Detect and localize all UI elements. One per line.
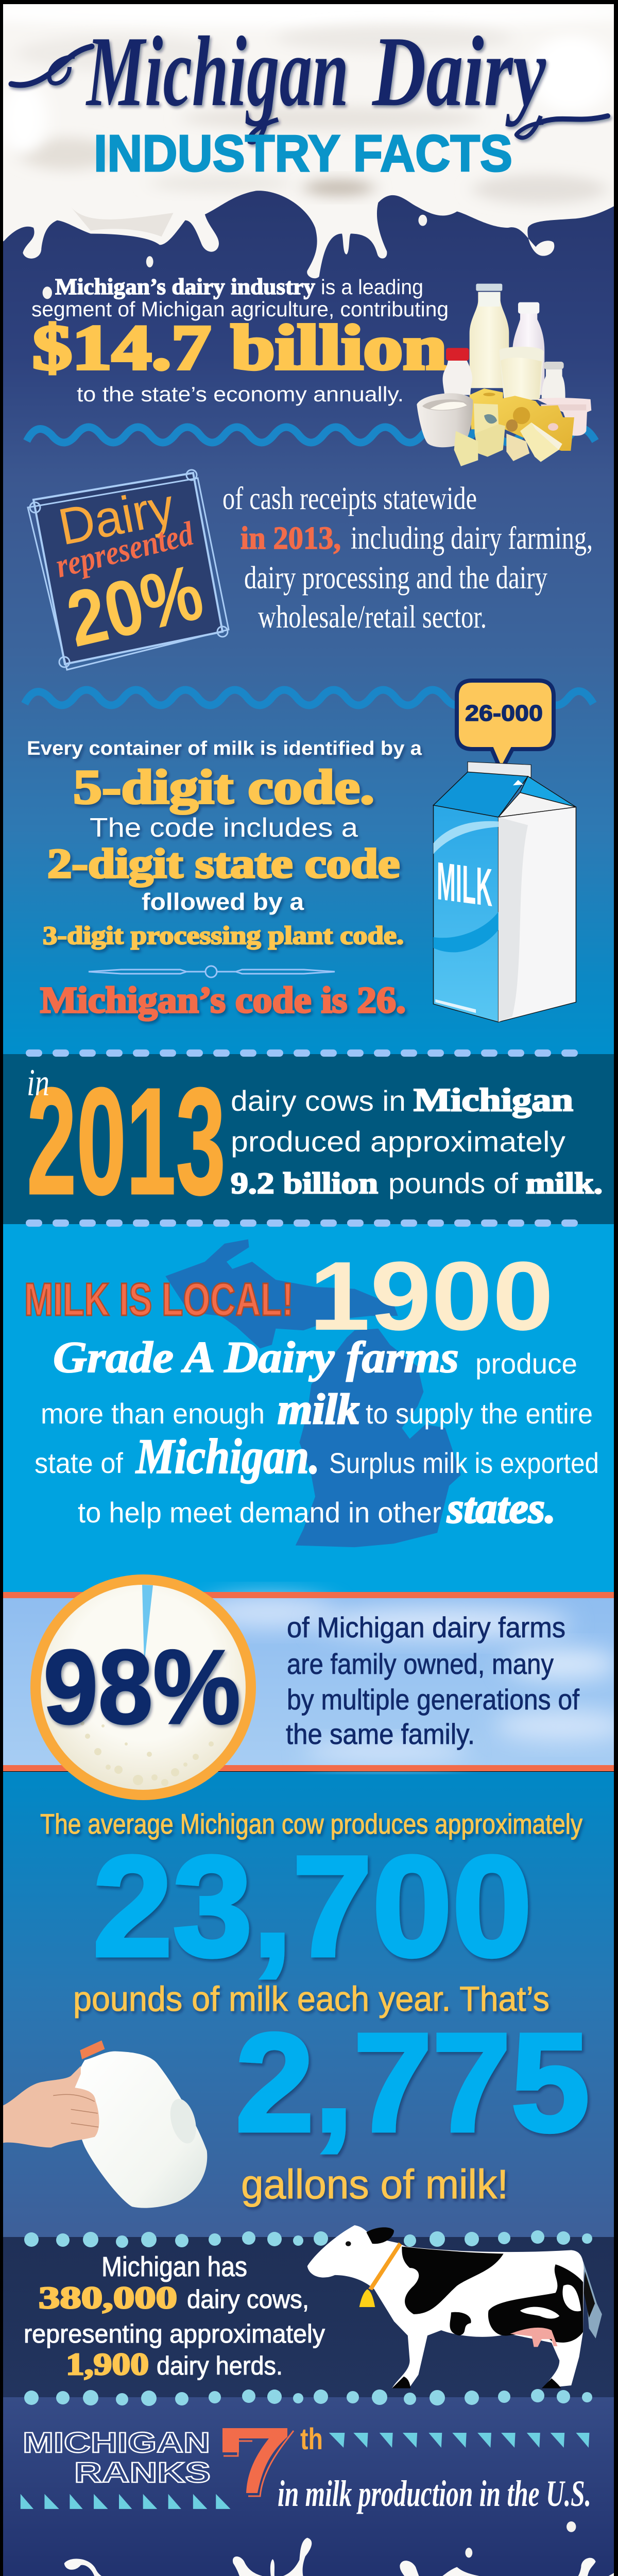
text: dairy industry intro (31, 274, 449, 321)
text: grade A farms: more than enough (41, 1397, 265, 1430)
band background (0, 2237, 618, 2397)
panel: milk code (27, 681, 576, 1022)
icon: cow (307, 2225, 602, 2388)
text: cow counts: 1,900 (66, 2347, 149, 2381)
pie chart: 98% (30, 1574, 256, 1800)
text: milk container code: 3-digit processing plant code. (43, 921, 404, 950)
text: dairy industry intro: Michigan’s dairy industry (55, 274, 315, 299)
text: pounds of milk: pounds of milk each year. That’s (73, 1979, 550, 2019)
text: production facts: produced approximately (231, 1125, 565, 1158)
text: grade A farms: produce (475, 1347, 577, 1380)
dots row (24, 2230, 592, 2406)
text: milk container code (27, 738, 422, 1021)
text: grade A farms: milk (278, 1385, 359, 1433)
lower gradient background (0, 2397, 618, 2576)
text: grade A farms: states. (447, 1484, 556, 1532)
text: production facts: milk. (526, 1166, 603, 1200)
speech bubble: 26-000: 26-000 (465, 701, 543, 726)
panel: 2013 production band (0, 1053, 618, 1226)
map: Michigan (165, 1239, 461, 1547)
text: cow counts: dairy herds. (157, 2351, 283, 2380)
panel: cow production background (0, 1772, 618, 2239)
text: family owned: by multiple generations of (287, 1683, 579, 1716)
text: gallons of milk: gallons of milk! (241, 2161, 508, 2207)
panel: 98 percent family owned (0, 1574, 618, 1800)
text: production facts: 9.2 billion (231, 1166, 378, 1200)
panel: header milk pour (0, 0, 618, 299)
panel: milk is local (0, 1223, 618, 1592)
text: cow counts: Michigan has (101, 2251, 247, 2282)
title: Michigan Dairy (11, 16, 608, 142)
text: production facts: dairy cows in (231, 1084, 406, 1117)
text: cow counts: representing approximately (24, 2319, 325, 2348)
panel: ranks 7th (21, 2422, 591, 2514)
triangle rows (21, 2433, 589, 2509)
text: in: in (27, 1062, 49, 1104)
text: th: th (300, 2422, 323, 2456)
text: milk container code: 2-digit state code (47, 841, 400, 887)
icon: dairy products (417, 284, 591, 466)
milk drip shape (0, 0, 618, 299)
text: grade A farms: state of (35, 1447, 123, 1479)
sky background (0, 1597, 618, 1767)
background gradient (0, 0, 618, 1054)
wave divider (25, 690, 593, 705)
text: production facts: Michigan (414, 1081, 573, 1118)
icon: milk carton: MILK (437, 851, 492, 918)
wave divider (27, 427, 595, 443)
icon: milk carton (434, 762, 576, 1022)
text: family owned: the same family. (286, 1718, 475, 1750)
stat: 7 (222, 2428, 294, 2496)
text: milk container code: The code includes a (90, 813, 358, 843)
badge: Dairy represented 20%: 20% (59, 548, 211, 664)
text: cow counts: dairy cows, (187, 2285, 309, 2314)
title: Michigan Dairy: Dairy (372, 16, 546, 127)
panel: 20 percent (25, 470, 593, 705)
stat: 23,700: 23,700 (93, 1826, 532, 1986)
panel: economy (27, 274, 595, 466)
text: family owned (286, 1611, 579, 1750)
dashes (29, 1049, 588, 1057)
text: grade A farms: to help meet demand in other (78, 1496, 441, 1529)
dashes (29, 1219, 588, 1227)
subtitle: Industry Facts: INDUSTRY FACTS (94, 125, 512, 182)
text: cow counts (24, 2251, 325, 2381)
milk splash shape (0, 2521, 618, 2576)
text: grade A farms: Michigan. (135, 1429, 320, 1484)
text: cash receipts: wholesale/retail sector. (258, 600, 487, 635)
text: grade A farms: to supply the entire (366, 1397, 593, 1430)
text: grade A farms: Grade A Dairy farms (53, 1332, 459, 1382)
text: production facts: pounds of (388, 1167, 518, 1199)
text: family owned: are family owned, many (287, 1648, 554, 1680)
stat: 2,775: 2,775 (235, 2004, 590, 2161)
stat: 1900: 1900 (309, 1242, 554, 1351)
text: milk container code: Every container of milk is identified by a (27, 738, 422, 759)
text: milk container code: followed by a (142, 888, 304, 915)
text: cash receipts: dairy processing and the dairy (244, 561, 547, 596)
text: dairy industry intro: segment of Michigan agriculture, contributing (31, 297, 449, 321)
heading: milk is local: MILK IS LOCAL! (24, 1274, 294, 1326)
text: production facts (231, 1081, 603, 1200)
panel: footer milk splash (0, 2521, 618, 2576)
text: cow counts: 380,000 (39, 2281, 177, 2315)
text: to the state's economy: to the state’s economy annually. (77, 382, 404, 406)
orange rules (0, 1595, 618, 1768)
badge: Dairy represented 20% (28, 470, 229, 670)
stat: $14.7 billion: $14.7 billion (32, 312, 447, 383)
text: Michigan ranks (23, 2426, 211, 2488)
speech bubble: 26-000 (457, 681, 554, 771)
panel: cow production (3, 1808, 590, 2208)
title: Michigan Dairy: Michigan (85, 16, 349, 127)
panel: cows and herds (0, 2225, 618, 2576)
text: Michigan ranks: RANKS (74, 2456, 211, 2488)
icon: milk jug and hand (3, 2040, 207, 2208)
text: cash receipts: of cash receipts statewide (222, 481, 477, 516)
text: milk container code: 5-digit code. (73, 760, 374, 814)
panel background (0, 1224, 618, 1592)
badge: Dairy represented 20%: represented (52, 515, 197, 585)
text: grade A farms (35, 1332, 599, 1532)
text: cash receipts (222, 481, 593, 635)
text: dairy industry intro: is a leading (321, 275, 423, 299)
text: milk container code: Michigan’s code is 26. (40, 979, 406, 1021)
stat: 2013: 2013 (27, 1056, 226, 1226)
badge: Dairy represented 20%: Dairy (54, 478, 179, 556)
band background (0, 1054, 618, 1224)
text: Michigan ranks: MICHIGAN (23, 2426, 210, 2459)
text: family owned: of Michigan dairy farms (287, 1611, 565, 1643)
divider ornament (89, 966, 335, 977)
text: cash receipts: in 2013, (241, 521, 341, 556)
pie chart: 98%: 98% (43, 1628, 241, 1746)
